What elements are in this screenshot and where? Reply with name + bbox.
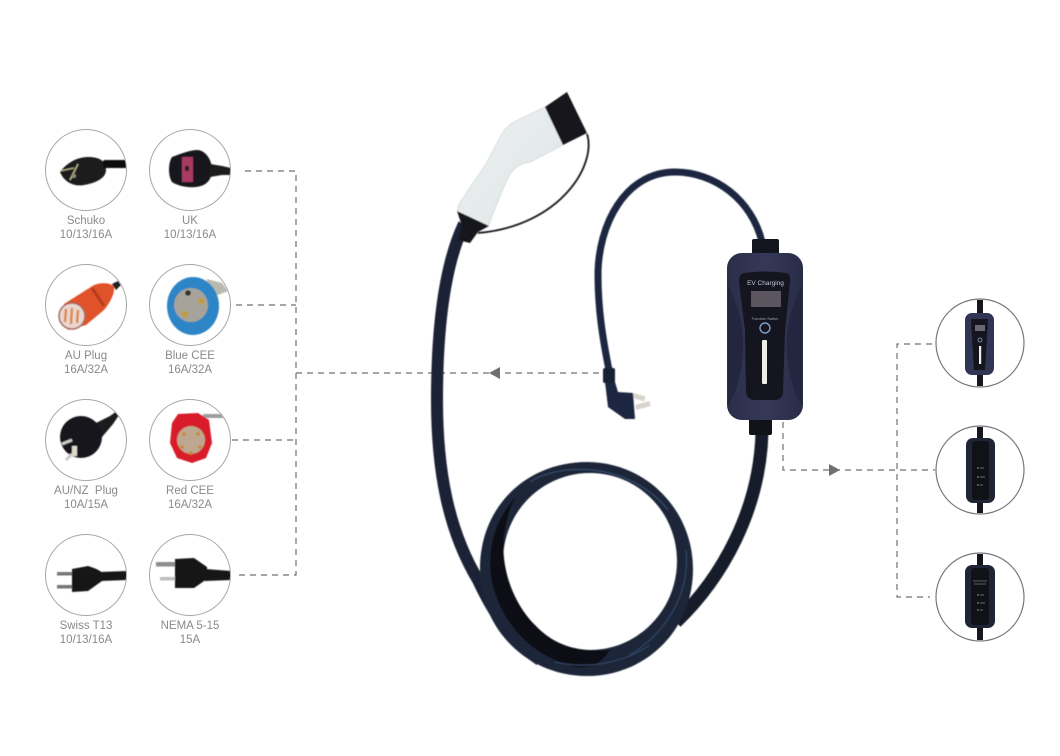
label: AU Plug: AU Plug bbox=[65, 350, 107, 362]
label: AU Plug: 16A/32A bbox=[64, 364, 108, 376]
status bar bbox=[762, 340, 767, 384]
label: NEMA 5-15: 15A bbox=[180, 634, 201, 646]
charging cable bbox=[437, 172, 762, 676]
label: Schuko: Schuko bbox=[67, 215, 105, 227]
option: screenless bbox=[936, 553, 1024, 641]
switch label: Function Switch bbox=[752, 317, 778, 321]
label: NEMA 5-15: NEMA 5-15 bbox=[161, 620, 219, 632]
handle bbox=[458, 107, 563, 227]
coil highlights bbox=[530, 469, 668, 510]
wall plug bbox=[603, 368, 651, 419]
EV connector bbox=[457, 92, 589, 243]
plug: Schuko bbox=[46, 130, 127, 241]
cable to control box bbox=[676, 432, 762, 622]
plug: Swiss T13 bbox=[46, 534, 127, 646]
control box options bbox=[936, 299, 1024, 641]
label: Swiss T13: Swiss T13 bbox=[60, 620, 112, 632]
label: Blue CEE: Blue CEE bbox=[165, 350, 215, 362]
plug: UK bbox=[150, 130, 231, 241]
title: EV Charging bbox=[747, 280, 784, 287]
coil bbox=[480, 462, 693, 676]
face panel bbox=[739, 272, 790, 400]
label: AU/NZ Plug: AU/NZ Plug bbox=[54, 485, 118, 497]
plug: Blue CEE bbox=[150, 264, 230, 376]
label: UK: 10/13/16A bbox=[164, 229, 217, 241]
cable to connector bbox=[437, 224, 540, 660]
arrow: control box options bbox=[829, 464, 840, 476]
label: Red CEE: 16A/32A bbox=[168, 499, 212, 511]
base bbox=[457, 211, 489, 243]
connector: plug options dashed lines bbox=[232, 171, 605, 575]
side grips bbox=[728, 285, 802, 405]
plug: AU Plug bbox=[46, 264, 126, 376]
connector: control box options dashed lines bbox=[783, 344, 935, 597]
label: UK: UK bbox=[182, 215, 198, 227]
display bbox=[751, 291, 781, 307]
plug: NEMA 5-15 bbox=[150, 534, 231, 646]
cable to wall plug bbox=[598, 172, 762, 370]
plug: AU/NZ Plug bbox=[46, 400, 126, 511]
arrow: plug options bbox=[489, 367, 500, 379]
cap bbox=[545, 92, 587, 145]
label: Schuko: 10/13/16A bbox=[60, 229, 113, 241]
label: Blue CEE: 16A/32A bbox=[168, 364, 212, 376]
label: Swiss T13: 10/13/16A bbox=[60, 634, 113, 646]
label: Red CEE: Red CEE bbox=[166, 485, 214, 497]
coil shadow bbox=[490, 497, 610, 667]
option: buttons bbox=[936, 426, 1024, 514]
plug options group bbox=[46, 130, 231, 646]
strap bbox=[478, 134, 589, 233]
label: AU/NZ Plug: 10A/15A bbox=[64, 499, 108, 511]
button ring bbox=[760, 323, 770, 333]
option: display front bbox=[936, 299, 1024, 387]
control box bbox=[727, 239, 803, 435]
plug: Red CEE bbox=[150, 400, 230, 511]
